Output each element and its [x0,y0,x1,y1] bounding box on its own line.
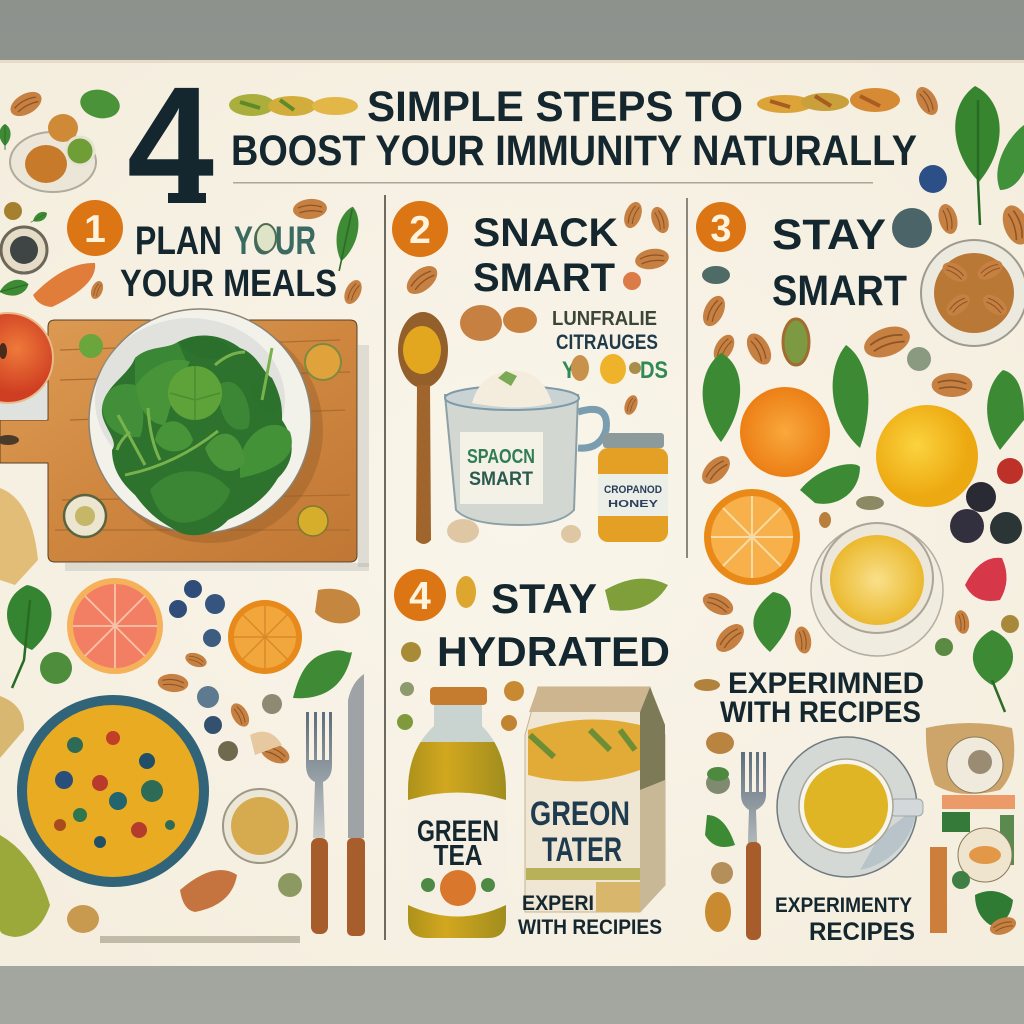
small sauce bowl [223,789,297,863]
jar label: CROPANOD [604,484,662,496]
step 4 badge [394,569,446,621]
step 2 text: SNACK [473,211,618,255]
step 3 fork [741,752,766,940]
step 1 badge [67,200,123,256]
carton label: GREON [530,795,630,833]
orange slice [228,600,302,674]
orange half [704,489,800,585]
wooden spoon [398,312,448,544]
cutting board [0,313,369,571]
step 3 right foods [926,723,1019,938]
step 3 badge [696,202,746,252]
step 3 scattered nuts and leaves [697,266,1024,601]
step 2 heading [392,201,618,300]
icon: leaf [78,86,122,122]
knife [347,674,365,936]
mug [445,371,606,525]
step 3 text: SMART [772,267,907,315]
spinach leaf left [7,585,72,688]
step 3 bottom caption [775,894,915,946]
experiment with recipes caption: WITH RECIPES [720,696,921,729]
step 1 garnish [0,205,365,307]
step 4 caption [518,892,662,939]
title herb garnish right [757,88,900,113]
step 2 badge [392,201,448,257]
curry bowl [17,695,209,887]
juice carton [525,687,665,912]
experiment with recipes caption: EXPERIMNED [728,667,924,700]
bottle label: GREEN [417,815,499,848]
step 2 small label [552,308,668,384]
whole orange [740,387,830,477]
step 2 text [473,211,618,300]
mug label: SPAOCN [467,446,535,468]
left edge foods [0,488,50,937]
step 1 text [120,219,337,305]
green tea bottle: TEA [434,840,483,872]
honey jar [598,433,668,542]
blueberries and nuts [157,580,360,768]
step 1 text: YOUR [234,219,316,263]
mug: SMART [469,469,533,490]
step 4 text: HYDRATED [437,628,670,675]
step 3 bottom caption: RECIPES [809,918,915,946]
step 3 bottom caption: EXPERIMENTY [775,894,912,917]
step 3 text: STAY [772,211,886,259]
spinach bowl [89,309,323,543]
juice carton: TATER [542,831,622,869]
almond dish [921,240,1024,346]
step 2 small label: DS [640,357,668,384]
experiment with recipes caption [720,667,924,729]
step 3 text [772,211,907,315]
step 4 badge: 4 [409,575,431,618]
step 3 heading [696,202,907,315]
step 1 lower foods [0,488,360,937]
step 4 text: STAY [491,575,597,622]
step 4 garnish [397,576,668,731]
soup bowl [811,523,943,656]
step 2 small label: Y [562,357,576,384]
title line 1: SIMPLE STEPS TO [367,83,743,131]
green tea bottle [408,687,506,938]
step 3 lower foods [694,589,1019,712]
step 3 left column foods [705,732,735,932]
apple [0,313,53,420]
step 1 heading [67,200,337,305]
title herb garnish left [229,94,358,116]
step 2 nuts [402,199,672,417]
step 4 text [437,575,670,675]
step 4 heading [394,569,670,675]
step 1 badge: 1 [84,208,106,251]
step 1 bottom foods [67,870,302,943]
top right food cluster [892,83,1024,248]
title line 2: BOOST YOUR IMMUNITY NATURALLY [231,127,917,175]
grapefruit [67,578,163,674]
step 3 badge: 3 [710,208,732,250]
step 1 text: PLAN [135,219,222,263]
step 2 small label: CITRAUGES [556,331,658,354]
small nuts under mug [447,519,581,543]
title numeral: 4 [127,53,214,232]
fork [306,712,332,934]
step 2 small label: LUNFRALIE [552,308,657,330]
top left food cluster [0,86,328,226]
step 2 text: SMART [473,256,615,300]
tea cup [777,737,923,877]
honey jar: HONEY [608,499,658,510]
title [127,53,917,232]
step 4 caption: EXPERI [522,892,594,915]
whole lemon [876,405,978,507]
step 2 badge: 2 [409,209,431,252]
step 1 text: YOUR MEALS [120,263,337,305]
step 4 caption: WITH RECIPIES [518,916,662,939]
